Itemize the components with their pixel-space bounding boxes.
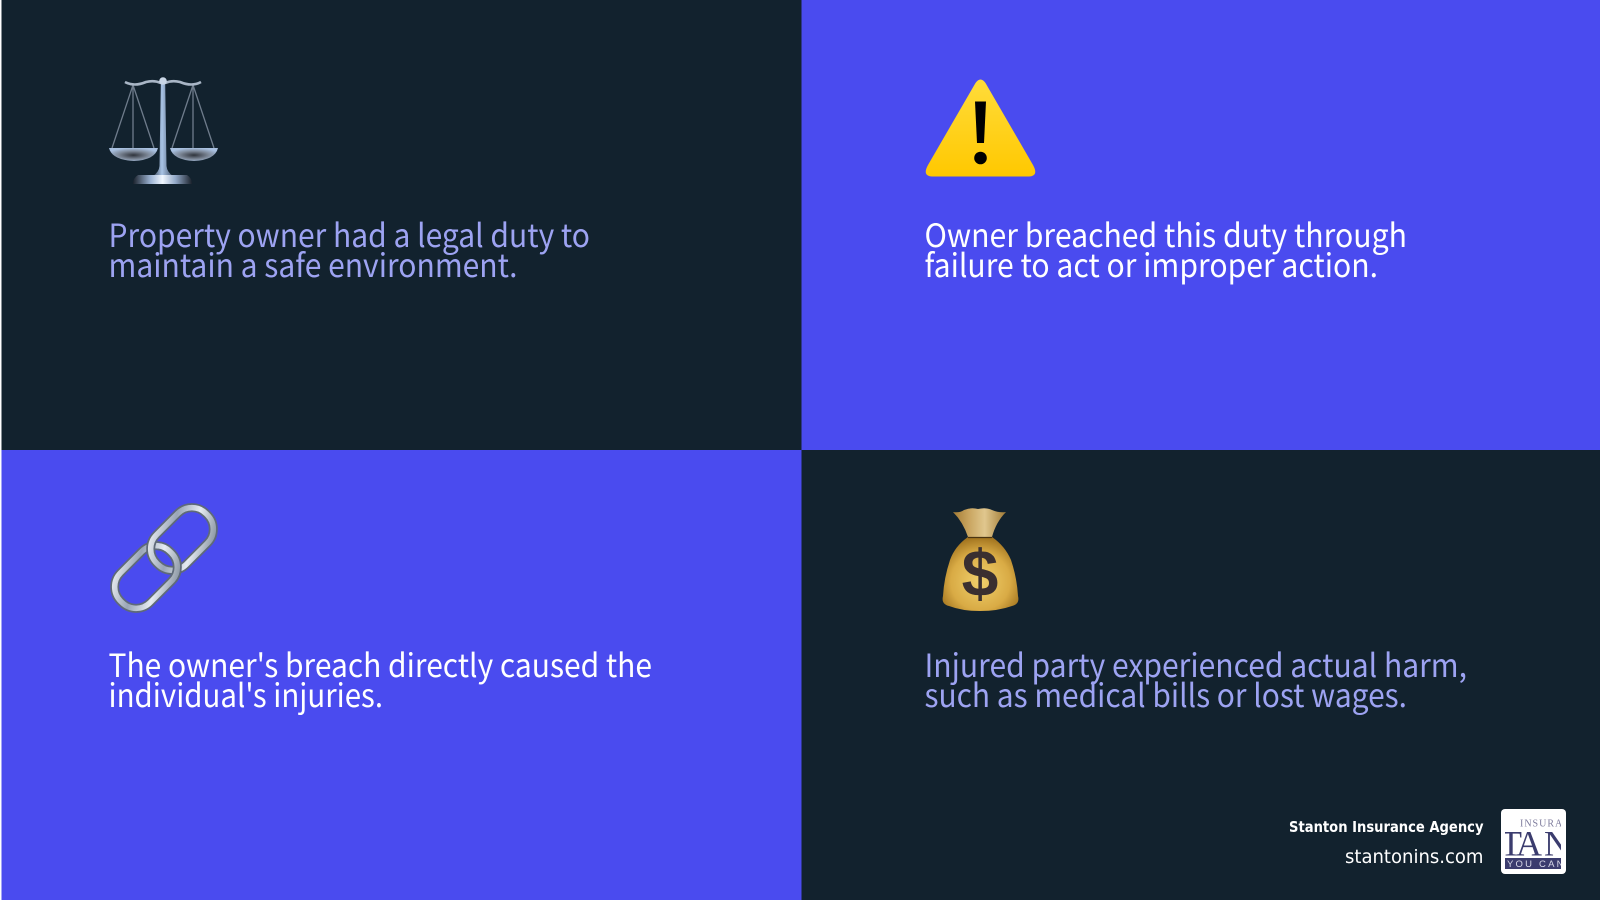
logo: TAN — [1500, 824, 1570, 864]
text: breach of duty: failure to act or improper action. — [924, 241, 1378, 287]
icon: money bag: $ — [962, 536, 998, 610]
icon: money bag — [943, 508, 1018, 611]
panel: breach of duty — [802, 0, 1600, 450]
logo — [1501, 809, 1566, 874]
text: damages: Injured party experienced actual harm, — [924, 641, 1467, 687]
text: duty of care: maintain a safe environment. — [108, 241, 518, 287]
logo: YOU CAN — [1507, 859, 1566, 870]
panel: duty of care — [0, 0, 802, 450]
text: breach of duty: Owner breached this duty through — [924, 211, 1407, 257]
logo: INSURANCE — [1520, 818, 1586, 830]
icon: warning triangle — [926, 80, 1035, 176]
icon: chain links — [110, 503, 218, 613]
panel: causation — [0, 450, 802, 900]
left edge strip — [0, 0, 2, 900]
footer: agency name: Stanton Insurance Agency — [1289, 818, 1484, 836]
text: damages: such as medical bills or lost wages. — [924, 671, 1407, 717]
text: causation: The owner's breach directly caused the — [108, 641, 652, 687]
footer: website: stantonins.com — [1345, 846, 1484, 868]
icon: balance scales — [109, 77, 218, 184]
panel: damages — [802, 450, 1600, 900]
text: causation: individual's injuries. — [108, 671, 383, 717]
text: duty of care: Property owner had a legal duty to — [108, 211, 590, 257]
